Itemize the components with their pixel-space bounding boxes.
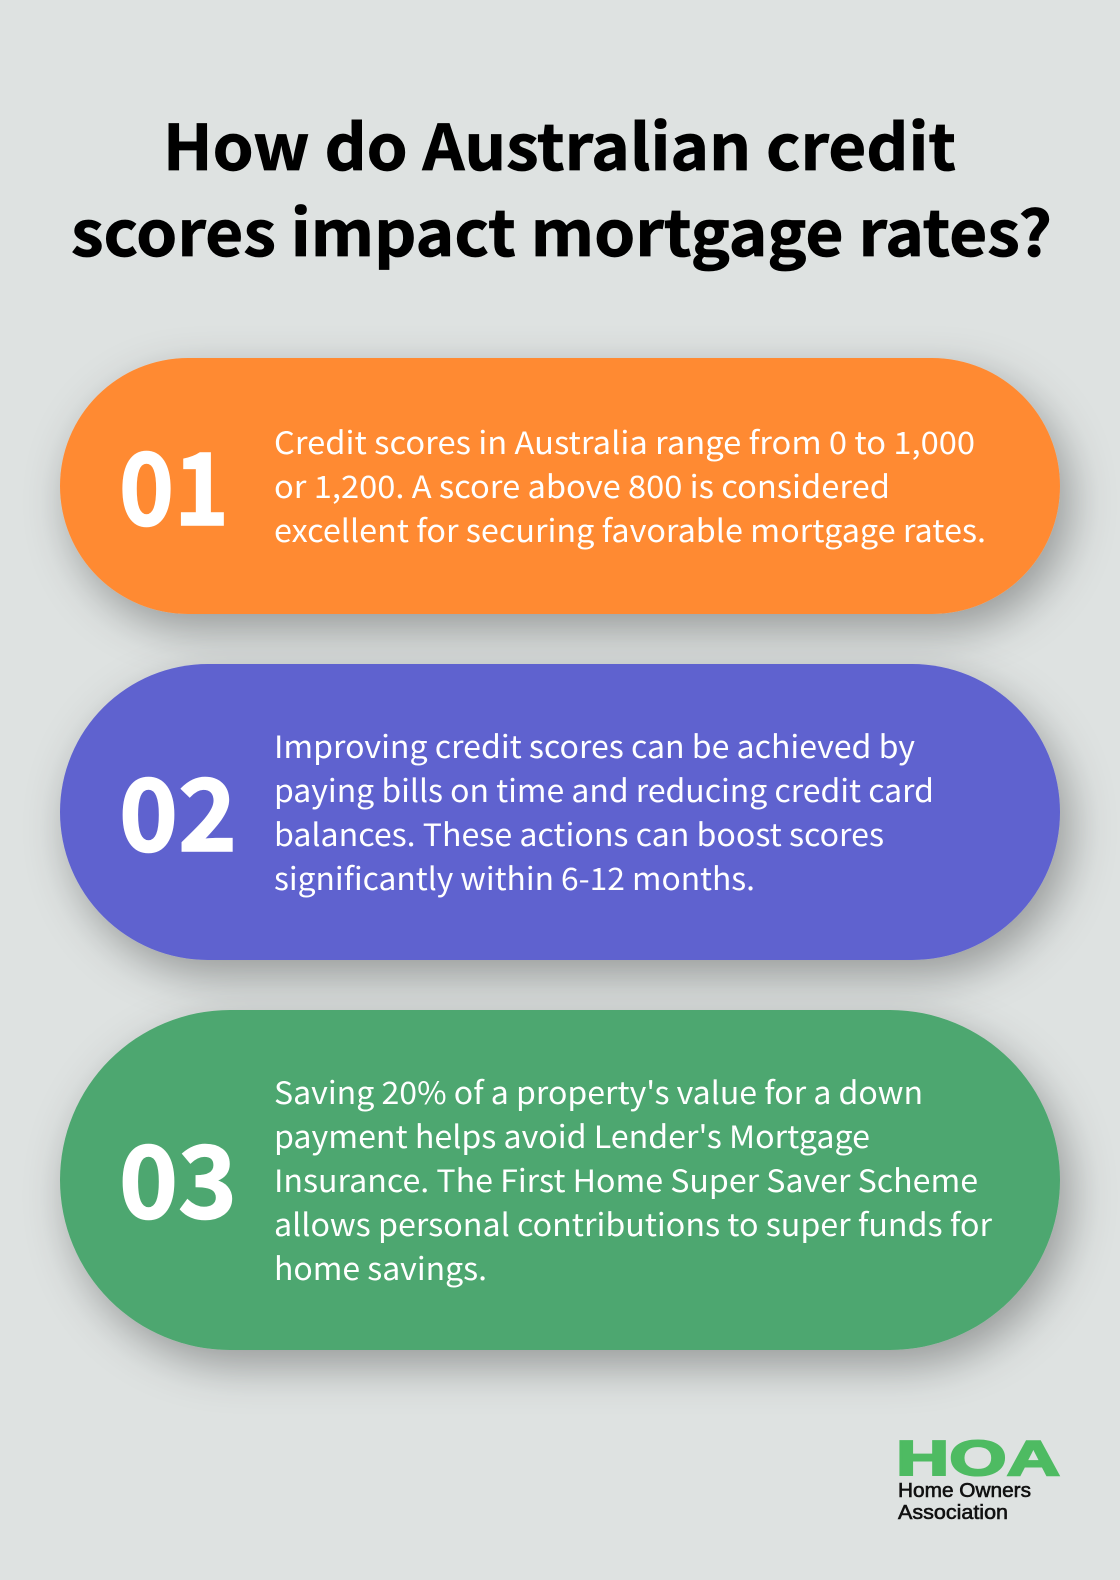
text block: step 03: Insurance. The First Home Super Saver Scheme [274, 1156, 978, 1201]
pill: purple background [60, 664, 1060, 960]
title: How do Australian credit [163, 98, 956, 189]
text block: step 02: balances. These actions can boost scores [274, 810, 884, 855]
text block: step 01: Credit scores in Australia range from 0 to 1,000 [274, 418, 975, 463]
text block: step 03: Saving 20% of a property's value for a down [274, 1068, 923, 1113]
text block: step 03 [274, 1068, 993, 1289]
logo text: Home Owners [898, 1480, 1031, 1502]
panel: step 01 [60, 358, 1060, 614]
text block: step 03: payment helps avoid Lender's Mortgage [274, 1112, 870, 1157]
number 02: 02 [119, 735, 237, 880]
title: scores impact mortgage rates? [71, 184, 1052, 275]
logo text: Association [898, 1502, 1008, 1524]
panel: step 02 [60, 664, 1060, 960]
text block: step 02 [274, 722, 934, 899]
logo mark: HOA: HOA [896, 1432, 1060, 1486]
logo text [898, 1480, 1031, 1524]
text block: step 02: Improving credit scores can be achieved by [274, 722, 915, 767]
text block: step 03: allows personal contributions to super funds for [274, 1200, 993, 1245]
pill: green background [60, 1010, 1060, 1350]
pill: orange background [60, 358, 1060, 614]
text block: step 02: significantly within 6-12 months. [274, 854, 755, 899]
logo: Home Owners Association [896, 1432, 1060, 1524]
text block: step 01: excellent for securing favorable mortgage rates. [274, 506, 986, 551]
text block: step 02: paying bills on time and reducing credit card [274, 766, 934, 811]
title [71, 98, 1052, 275]
text block: step 03: home savings. [274, 1244, 487, 1289]
text block: step 01: or 1,200. A score above 800 is considered [274, 462, 890, 507]
text block: step 01 [274, 418, 986, 551]
number 03: 03 [119, 1102, 237, 1247]
panel: step 03 [60, 1010, 1060, 1350]
number 01: 01 [119, 409, 229, 554]
